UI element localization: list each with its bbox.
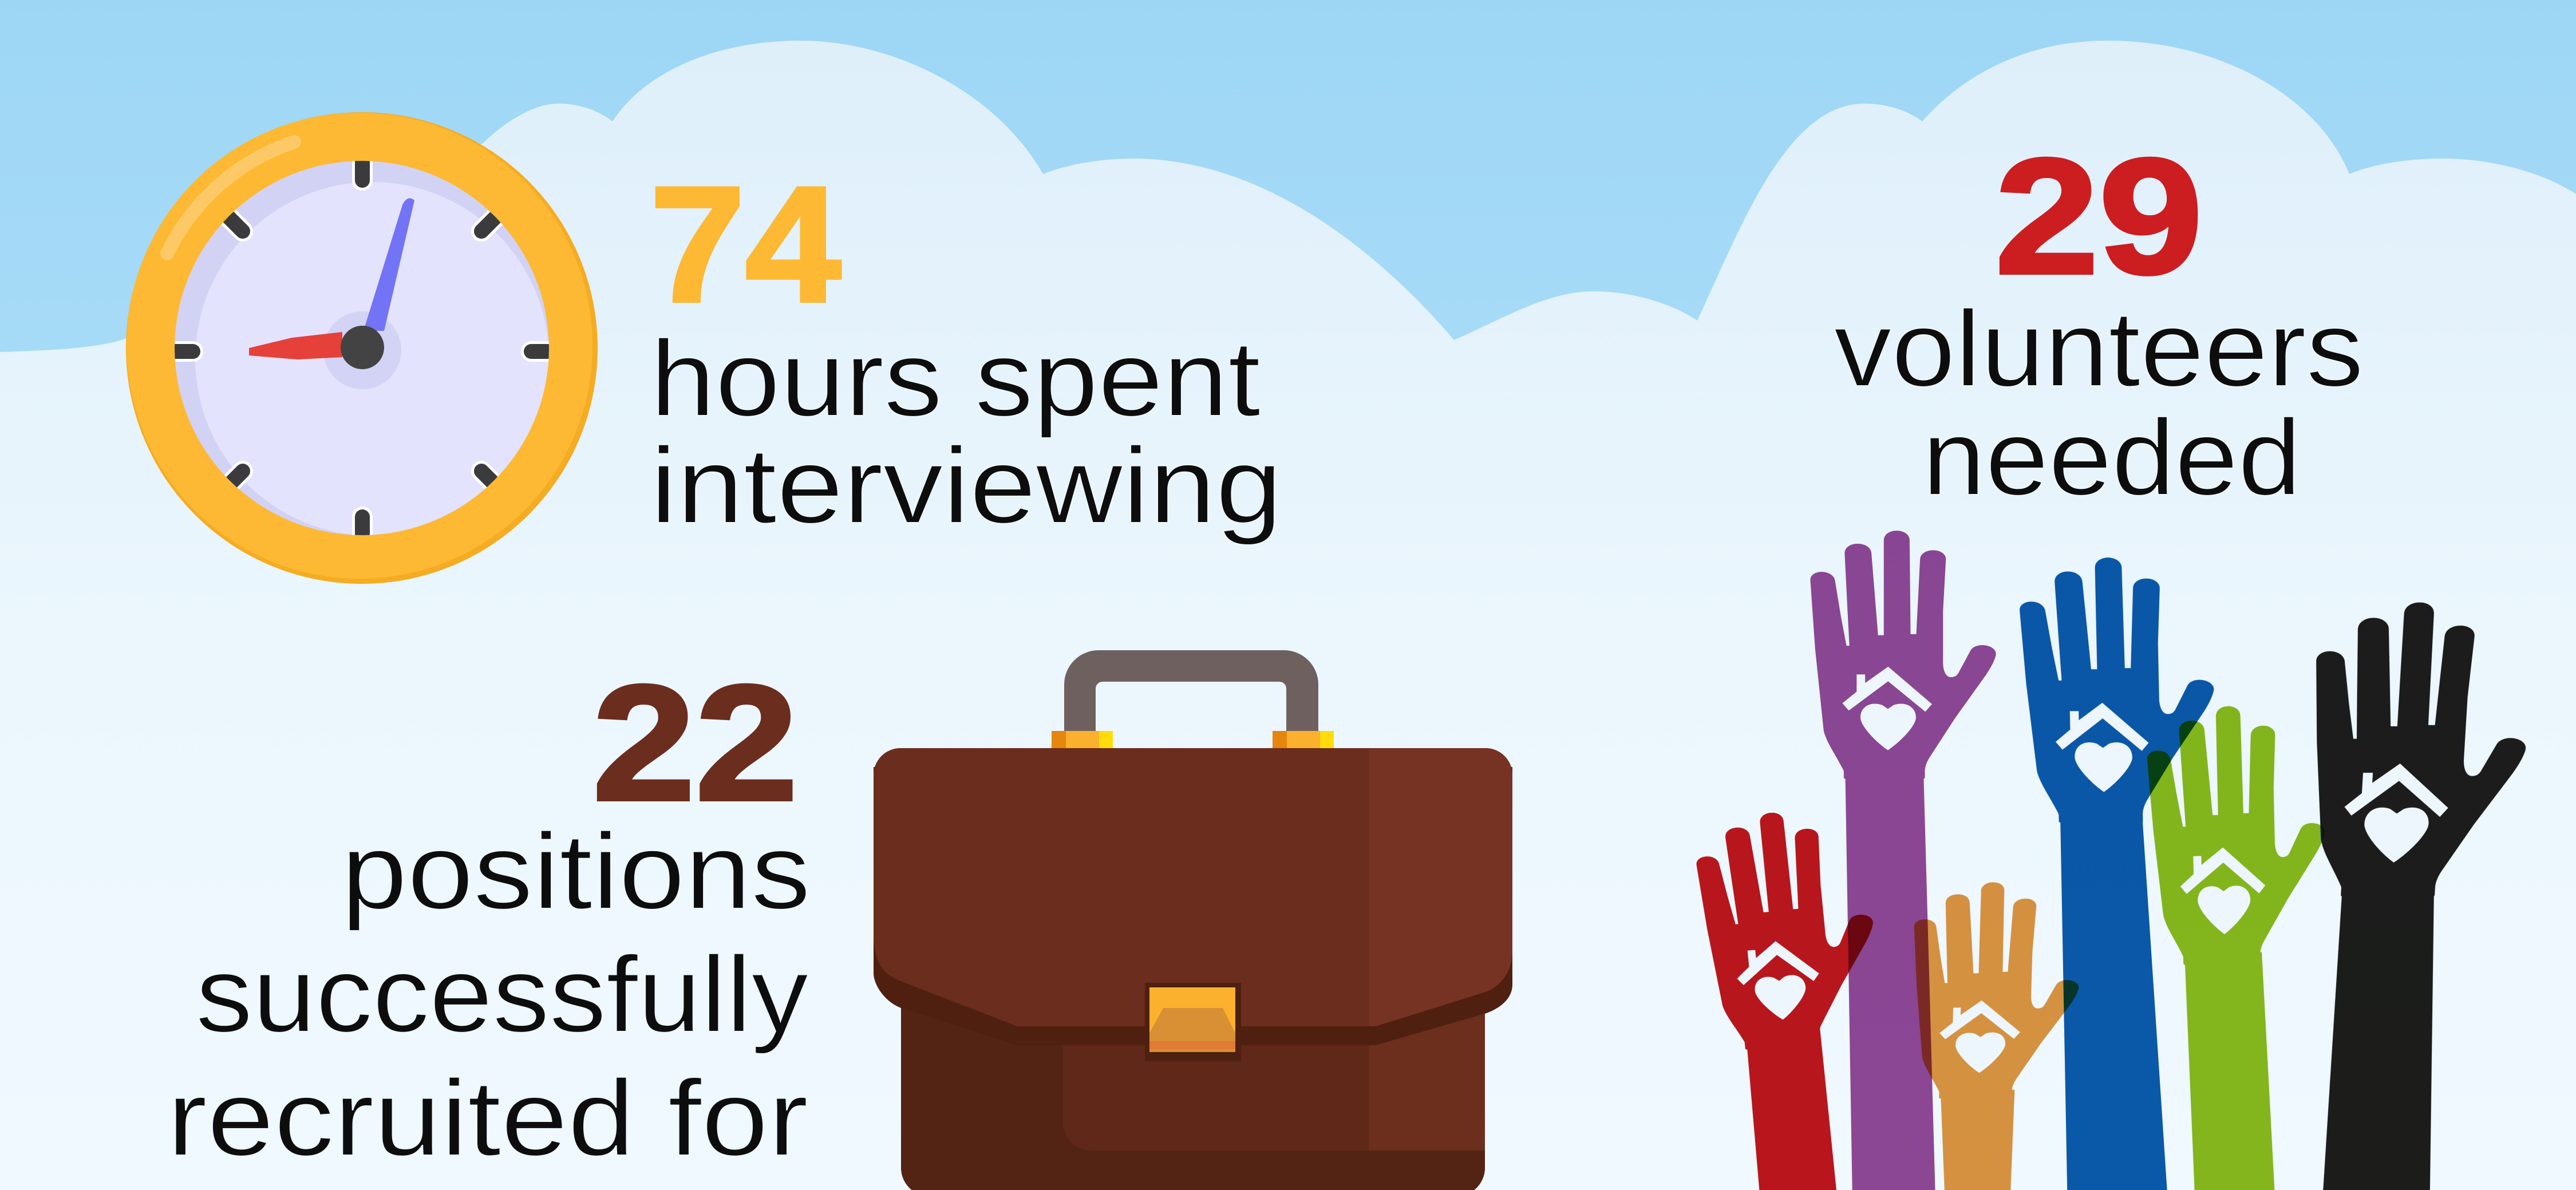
number 74: 74: [650, 152, 842, 336]
briefcase icon: [874, 650, 1512, 1190]
number 22: 22: [592, 651, 798, 835]
clock hub: [341, 326, 384, 369]
flap right panel: [1369, 748, 1512, 1026]
number 29: 29: [1995, 124, 2203, 308]
label line 2: successfully: [196, 934, 808, 1054]
orange hand: [1910, 881, 2081, 1190]
label line 2: needed: [1922, 397, 2301, 517]
raised hands illustration: [1693, 532, 2532, 1190]
clock outer ring: [126, 112, 598, 584]
green hand: [2147, 705, 2326, 1190]
stat: 29 volunteers needed: [1834, 124, 2364, 517]
background sky: [0, 0, 2576, 401]
hour hand: [249, 332, 342, 359]
stat: 22 positions successfully recruited for: [167, 651, 811, 1178]
clock face: [175, 161, 549, 536]
hour ticks: [172, 155, 552, 544]
blue hand: [2020, 559, 2215, 1190]
hub halo: [323, 311, 401, 389]
minute hand: [364, 198, 414, 331]
purple hand: [1812, 532, 1994, 1190]
handle: [1064, 650, 1318, 736]
label line 2: interviewing: [650, 425, 1282, 545]
red hand: [1693, 807, 1883, 1190]
stat: 74 hours spent interviewing: [650, 152, 1282, 545]
ring highlight: [167, 142, 294, 254]
flap: [874, 748, 1512, 1026]
right bracket: [1273, 731, 1334, 749]
clock icon: [126, 112, 598, 584]
label line 1: hours spent: [650, 318, 1261, 438]
black hand: [2304, 604, 2532, 1190]
clasp: [1145, 983, 1241, 1061]
label line 3: recruited for: [167, 1058, 808, 1178]
flap shadow: [874, 767, 1512, 1045]
case body: [901, 1008, 1485, 1190]
label line 1: volunteers: [1834, 288, 2364, 409]
label line 1: positions: [341, 811, 811, 931]
left bracket: [1052, 731, 1113, 749]
